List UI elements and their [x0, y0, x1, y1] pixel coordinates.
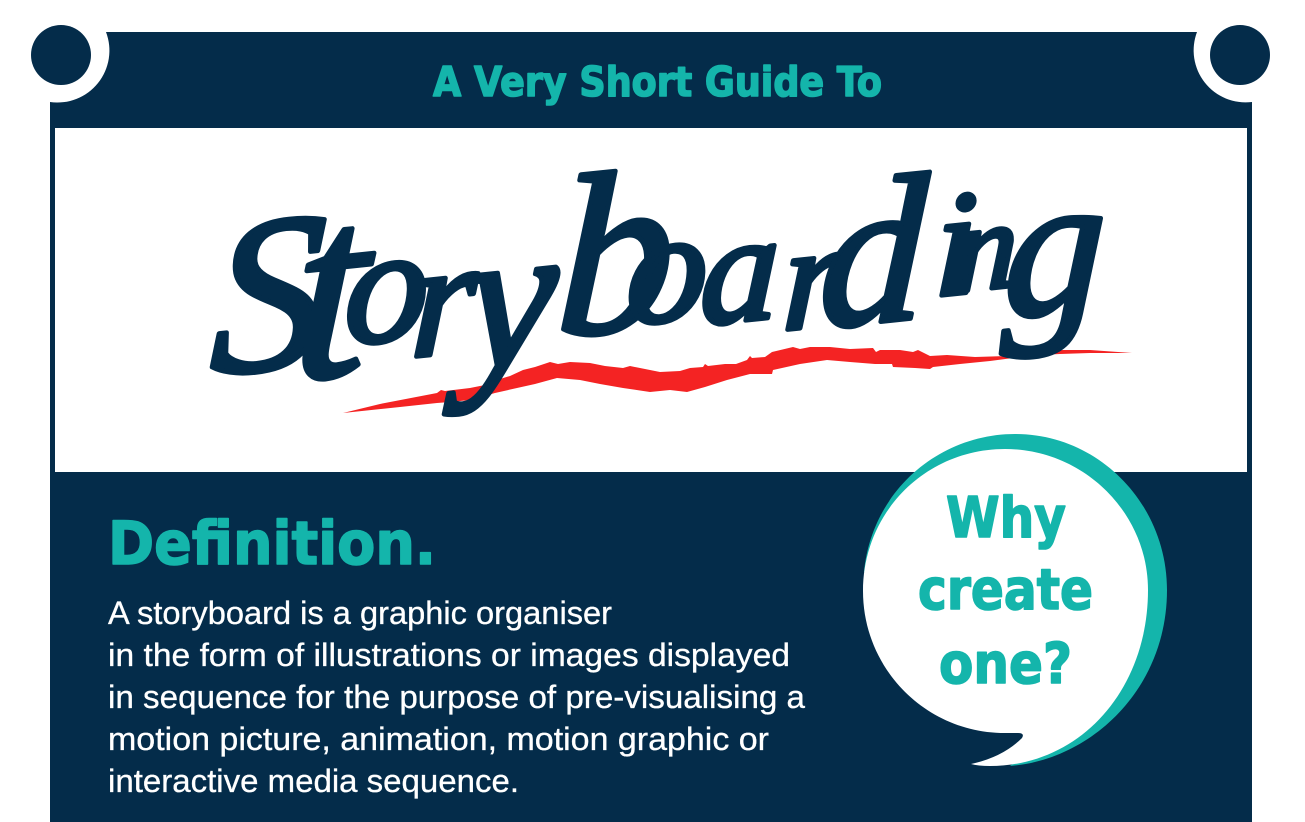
- icon: left corner dot: [31, 25, 91, 85]
- bubble text: Why create one?: [918, 486, 1093, 697]
- text block: definition body: A storyboard is a graphic organiser: [108, 595, 612, 631]
- title: Storyboarding: a: [680, 179, 800, 359]
- title: Storyboarding: t: [259, 141, 412, 436]
- text block: definition body: [108, 595, 805, 799]
- bubble teal shadow: [864, 434, 1167, 766]
- title: Storyboarding: g: [978, 131, 1133, 362]
- heading: Definition.: Definition.: [108, 509, 436, 579]
- title: Storyboarding: r: [763, 191, 864, 363]
- title: Storyboarding: S: [182, 164, 356, 423]
- title: Storyboarding: b: [526, 120, 706, 387]
- title: Storyboarding: r: [389, 204, 499, 393]
- title: Storyboarding: n: [938, 176, 1034, 320]
- icon: right corner dot: [1210, 25, 1270, 85]
- bubble text: Why create one?: create: [918, 558, 1093, 623]
- title: Storyboarding: o: [323, 190, 451, 381]
- heading: A Very Short Guide To: A Very Short Guide To: [433, 58, 882, 106]
- bubble text: Why create one?: Why: [946, 486, 1066, 551]
- title: Storyboarding: i: [915, 159, 998, 329]
- bubble white body: [863, 449, 1148, 766]
- text block: definition body: motion picture, animation, motion graphic or: [108, 721, 769, 757]
- text block: definition body: in the form of illustrations or images displayed: [108, 637, 790, 673]
- red brush underline: [343, 347, 1132, 413]
- panel: white title panel: [55, 128, 1247, 472]
- title: Storyboarding: y: [420, 178, 586, 416]
- title: Storyboarding: d: [792, 131, 956, 374]
- title: Storyboarding: o: [606, 175, 730, 360]
- text block: definition body: in sequence for the purpose of pre-visualising a: [108, 679, 805, 715]
- bubble text: Why create one?: one?: [939, 632, 1072, 697]
- callout: speech bubble: [863, 434, 1167, 766]
- text block: definition body: interactive media sequence.: [108, 763, 519, 799]
